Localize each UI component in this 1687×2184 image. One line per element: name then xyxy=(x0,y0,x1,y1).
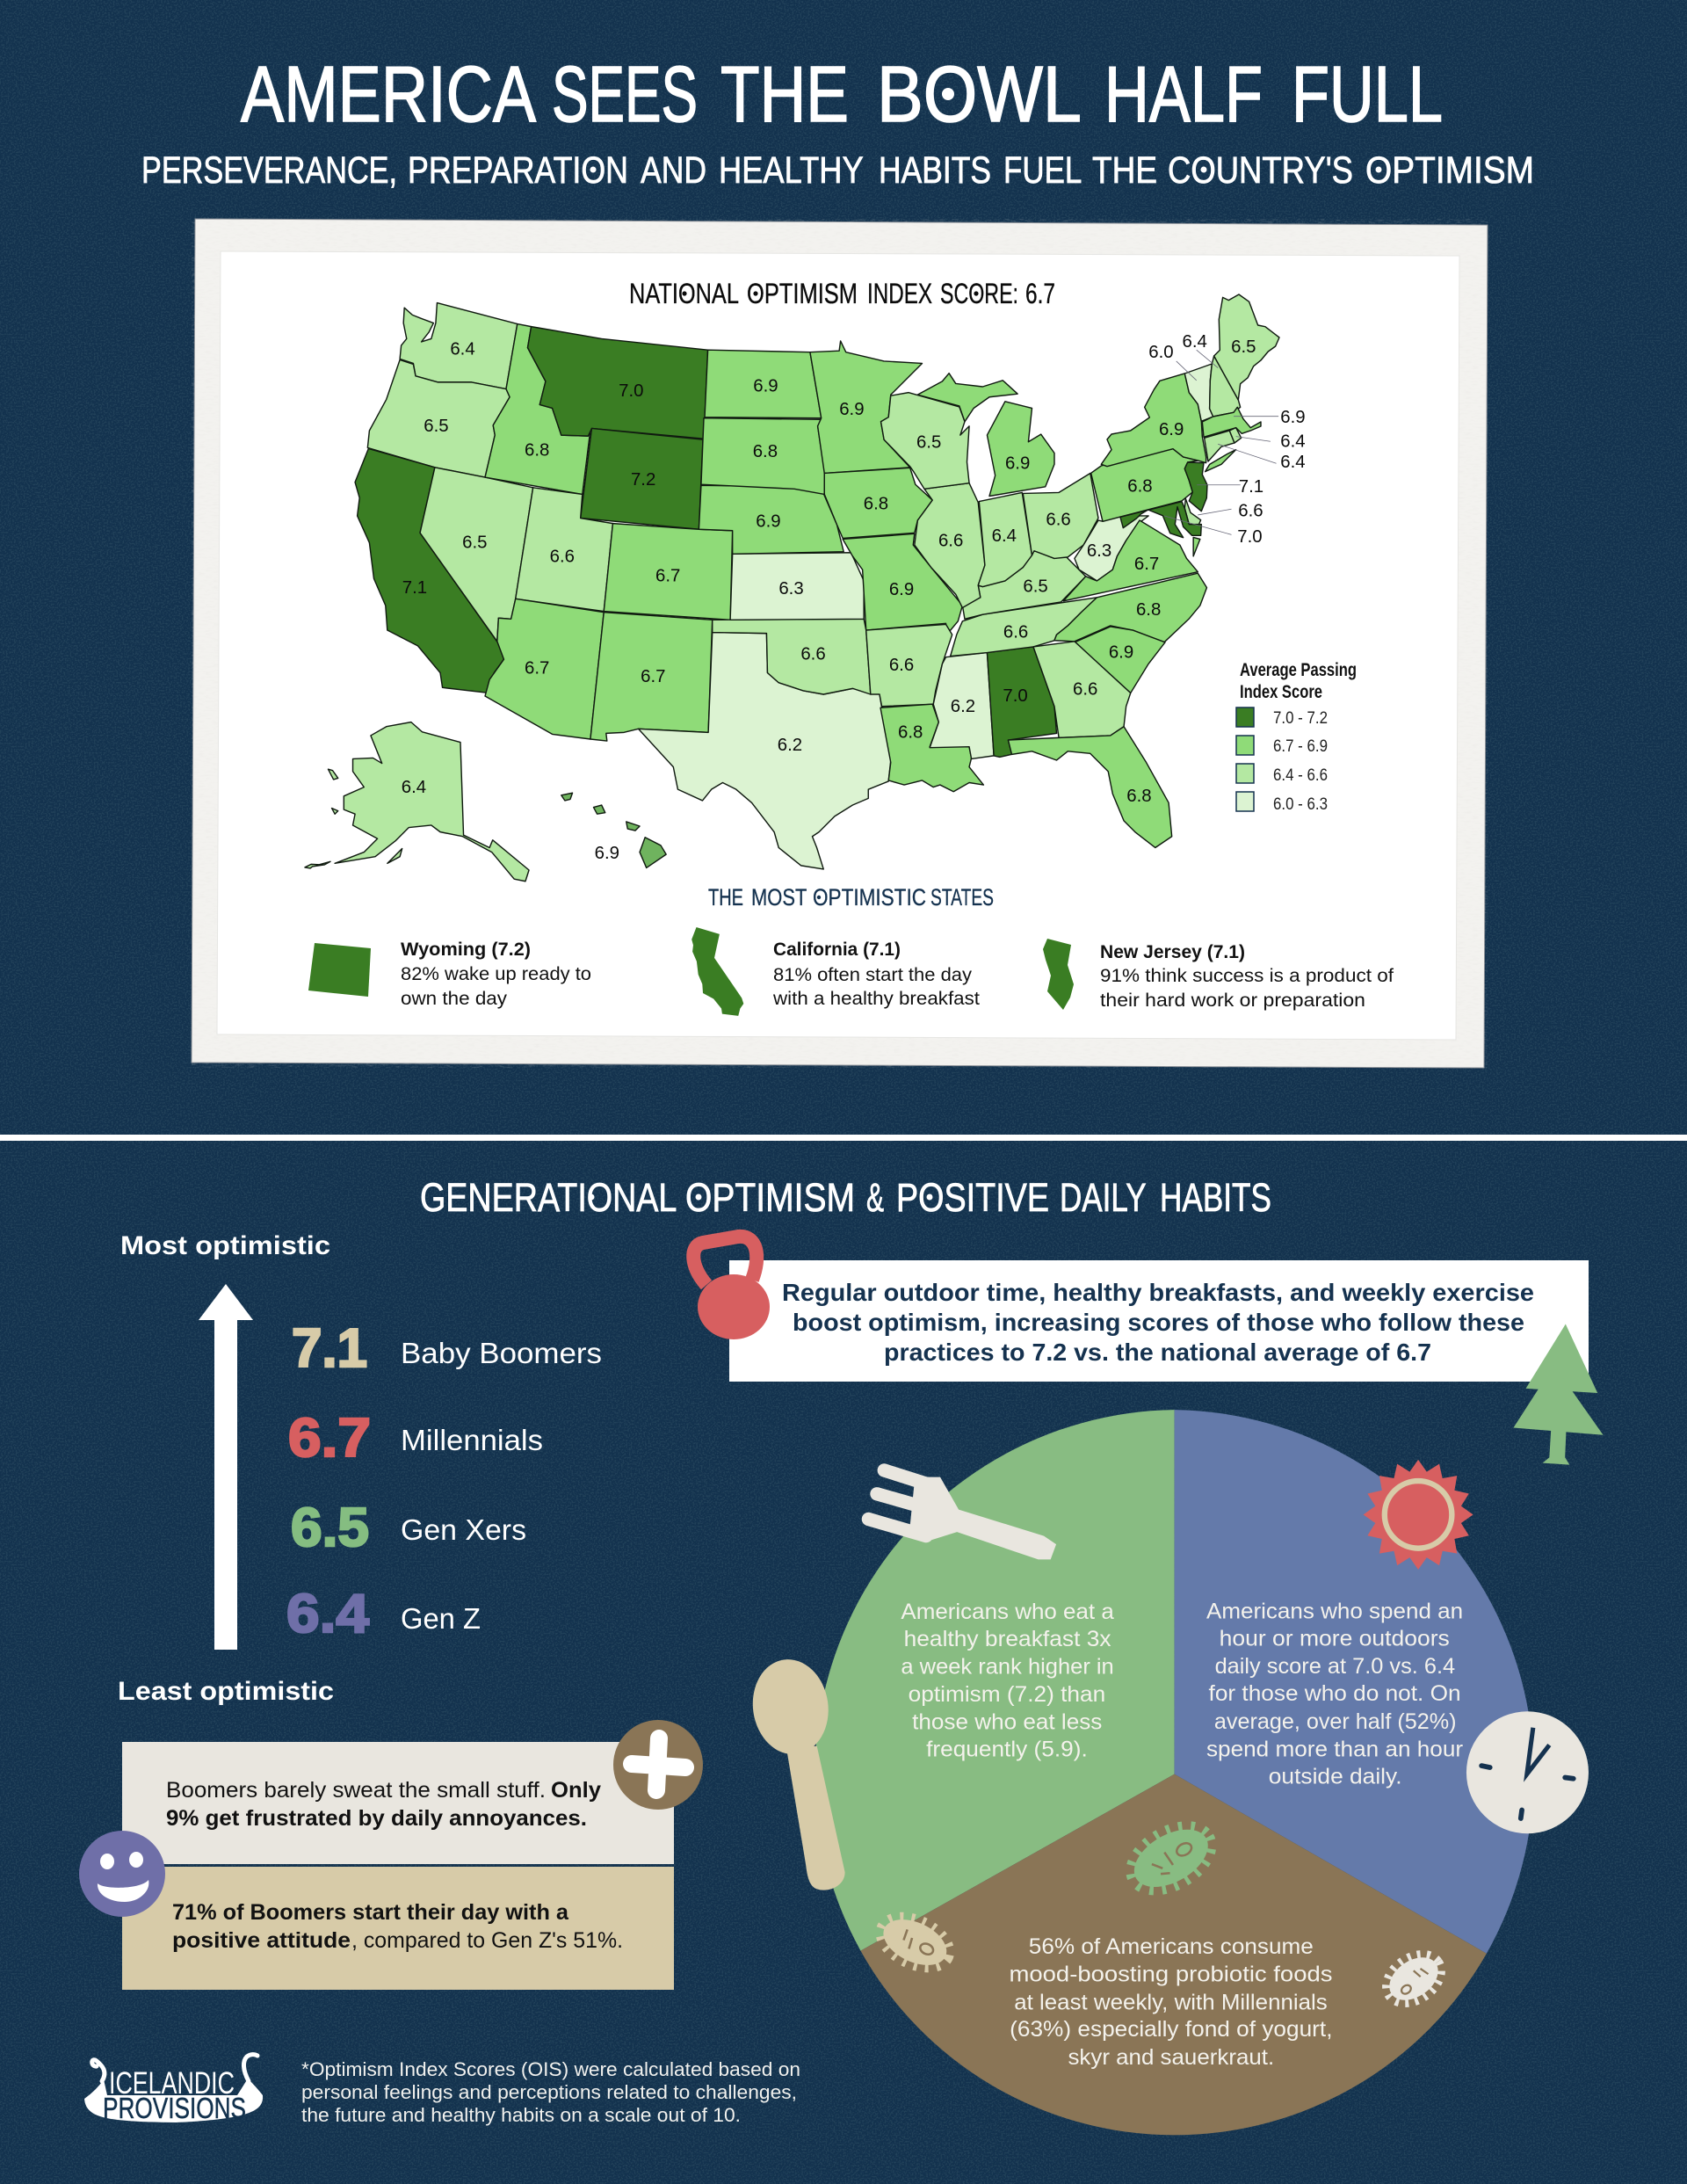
title: HALF xyxy=(1104,51,1263,139)
Alaska island: Nunivak xyxy=(332,809,338,814)
state score labels, west: 7.2 xyxy=(631,470,655,490)
state: Hawaii, Oahu xyxy=(594,805,605,814)
state: California xyxy=(355,448,503,693)
state: Missouri xyxy=(843,533,962,635)
title xyxy=(241,51,1443,139)
state: Idaho xyxy=(485,324,590,494)
state: Hawaii, big island xyxy=(640,838,666,867)
state: Alaska xyxy=(335,722,529,882)
state: New Mexico xyxy=(590,613,713,741)
state: North Carolina xyxy=(1054,573,1206,642)
state score labels, east: 6.6 xyxy=(1238,501,1263,520)
score: Baby Boomers: 7.1 xyxy=(292,1318,367,1379)
pie text: outdoors: spend more than an hour xyxy=(1206,1737,1463,1761)
state: Long Island xyxy=(1206,450,1236,472)
heading: most optimistic states: STATES xyxy=(930,884,994,911)
pie text: outdoors: Americans who spend an xyxy=(1206,1599,1463,1623)
title: AMERICA xyxy=(241,51,536,139)
legend xyxy=(1236,660,1357,814)
logo: Icelandic Provisions: ICELANDIC xyxy=(109,2066,235,2101)
label: Gen Xers: Gen Xers xyxy=(401,1513,526,1546)
state score labels, west: 6.6 xyxy=(800,645,826,664)
legend swatch 7.0-7.2 xyxy=(1236,707,1254,727)
title: THE xyxy=(720,51,849,139)
label: Gen Z: Gen Z xyxy=(401,1602,481,1635)
heading: most optimistic states: MOST xyxy=(751,884,807,911)
state: Maine xyxy=(1214,294,1279,400)
title: SEES xyxy=(552,51,698,139)
subtitle: HABITS xyxy=(879,149,991,192)
state: Arkansas xyxy=(866,624,952,707)
section heading: & xyxy=(866,1175,884,1220)
state score labels, east: 6.3 xyxy=(1087,541,1111,561)
state: North Dakota xyxy=(705,350,822,418)
state score labels, west: 6.7 xyxy=(525,659,549,678)
score: Gen Z: 6.4 xyxy=(286,1584,370,1644)
legend swatch 6.7-6.9 xyxy=(1236,736,1254,755)
state score labels, west: 6.7 xyxy=(655,566,680,585)
state score labels, east: 6.8 xyxy=(1136,600,1161,620)
state: Nebraska xyxy=(699,485,844,554)
Alaska island: Aleutians xyxy=(305,861,330,868)
state score labels, west: 6.9 xyxy=(595,844,619,863)
heading: most optimistic states: OPTIMISTIC xyxy=(813,884,926,911)
state score labels, west: 6.2 xyxy=(778,736,802,755)
pie text: probiotics xyxy=(1009,1934,1333,2070)
label: least optimistic: Least optimistic xyxy=(118,1677,334,1706)
pie text: breakfast: a week rank higher in xyxy=(901,1654,1114,1679)
eastern states xyxy=(810,294,1279,847)
state: Arizona xyxy=(485,599,604,739)
legend swatch 6.4-6.6 xyxy=(1236,764,1254,783)
pie text: outdoors: average, over half (52%) xyxy=(1214,1709,1456,1734)
heading: most optimistic states xyxy=(708,884,994,911)
state score labels, east: 6.8 xyxy=(864,494,888,513)
state: New York xyxy=(1101,374,1206,467)
pie text: probiotics: at least weekly, with Millennials xyxy=(1014,1991,1328,2015)
pie text: outdoors: hour or more outdoors xyxy=(1220,1627,1450,1651)
state score labels, east: 6.5 xyxy=(1231,337,1256,357)
icon: kettlebell xyxy=(693,1237,770,1339)
pie text: probiotics: 56% of Americans consume xyxy=(1029,1934,1314,1959)
state: Virginia eastern shore xyxy=(1193,537,1200,556)
pie text: breakfast: optimism (7.2) than xyxy=(909,1682,1105,1707)
state: Florida xyxy=(1008,727,1172,847)
state score labels, east: 7.0 xyxy=(1003,686,1028,706)
state score labels, east: 6.6 xyxy=(1046,511,1071,530)
state score labels, east: 6.4 xyxy=(1280,432,1306,451)
state score labels, east: 7.0 xyxy=(1237,527,1263,547)
icon: California xyxy=(691,927,743,1016)
state: Hawaii, Maui xyxy=(626,822,640,831)
callout: Boomers positive attitude: , compared to Gen Z's 51%. xyxy=(351,1928,623,1953)
section heading: OPTIMISM xyxy=(685,1175,855,1220)
state score labels, west: 7.0 xyxy=(619,381,644,401)
state: Hawaii, Kauai xyxy=(561,793,573,801)
footnote: personal feelings and perceptions related to challenges, xyxy=(301,2081,797,2103)
text: California: 81% often start the day xyxy=(773,965,973,985)
callout: Boomers positive attitude xyxy=(122,1867,674,1990)
text: Wyoming: own the day xyxy=(401,989,508,1009)
state score labels, east: 6.6 xyxy=(938,532,963,551)
pie text: probiotics: (63%) especially fond of yogurt, xyxy=(1010,2017,1333,2042)
state: Alabama xyxy=(987,647,1057,757)
icon: clock xyxy=(1466,1711,1589,1833)
arrow xyxy=(199,1284,253,1650)
state score labels, east: 6.9 xyxy=(1159,420,1184,439)
state score labels, east: 6.0 xyxy=(1148,343,1174,362)
icon: Wyoming xyxy=(308,943,371,997)
leader lines xyxy=(1164,350,1278,534)
score: Millennials: 6.7 xyxy=(288,1408,371,1469)
state: Washington xyxy=(400,303,518,389)
state score labels, east: 6.6 xyxy=(1073,680,1097,700)
state: Delaware xyxy=(1184,498,1201,526)
text: California: with a healthy breakfast xyxy=(772,989,980,1009)
state score labels, east: 6.4 xyxy=(1183,332,1207,352)
pie text: breakfast: Americans who eat a xyxy=(901,1600,1114,1624)
state: Louisiana xyxy=(880,704,983,792)
state: Connecticut xyxy=(1205,431,1234,461)
Alaska island: St Lawrence xyxy=(328,769,338,780)
state: Vermont xyxy=(1184,364,1213,421)
footnote: *Optimism Index Scores (OIS) were calculated based on xyxy=(301,2058,800,2080)
state: Illinois xyxy=(915,483,985,608)
state score labels, east: 6.2 xyxy=(951,697,975,716)
state score labels, east: 6.8 xyxy=(898,722,923,742)
map heading: OPTIMISM xyxy=(747,278,858,309)
section heading: DAILY xyxy=(1060,1175,1147,1220)
callout: Boomers positive attitude: positive attitude xyxy=(172,1928,351,1953)
generation scores xyxy=(286,1318,602,1644)
callout: Boomers frustration xyxy=(122,1742,674,1864)
state: Pennsylvania xyxy=(1091,449,1198,521)
text: Wyoming: 82% wake up ready to xyxy=(401,964,591,984)
subtitle: THE xyxy=(1092,149,1157,192)
state score labels, west xyxy=(402,339,826,863)
pie text: probiotics: skyr and sauerkraut. xyxy=(1068,2045,1274,2070)
northeastern states xyxy=(1091,294,1279,538)
state: New Jersey xyxy=(1184,462,1207,512)
divider xyxy=(0,1135,1687,1141)
map heading: 6.7 xyxy=(1025,278,1055,309)
state score labels, west: 6.6 xyxy=(550,547,575,566)
callout: habits: boost optimism, increasing scores of those who follow these xyxy=(793,1309,1524,1336)
state: Kansas xyxy=(730,553,864,620)
state score labels, west: 6.7 xyxy=(641,667,666,686)
state: Michigan, lower peninsula xyxy=(987,402,1054,496)
text: New Jersey: New Jersey (7.1) xyxy=(1100,942,1245,962)
logo: Icelandic Provisions: PROVISIONS xyxy=(103,2092,246,2124)
state: Colorado xyxy=(604,524,733,620)
state score labels, west: 6.8 xyxy=(753,442,778,461)
state score labels, east: 6.8 xyxy=(1127,476,1153,496)
state: Virginia xyxy=(1063,520,1198,601)
text: New Jersey: their hard work or preparation xyxy=(1100,990,1365,1011)
icon: smiley xyxy=(79,1831,165,1917)
pie text: outdoors: for those who do not. On xyxy=(1209,1681,1461,1706)
text: California xyxy=(772,940,980,1009)
state score labels, east: 6.4 xyxy=(1280,453,1306,472)
label: most optimistic: Most optimistic xyxy=(120,1231,330,1260)
text: California: California (7.1) xyxy=(773,940,901,960)
state score labels, east: 6.9 xyxy=(889,580,914,599)
state score labels, west: 7.1 xyxy=(402,578,427,598)
callout: Boomers frustration: 9% get frustrated by daily annoyances. xyxy=(166,1806,587,1831)
subtitle: FUEL xyxy=(1003,149,1082,192)
state: Massachusetts xyxy=(1202,407,1261,437)
subtitle: OPTIMISM xyxy=(1365,149,1534,192)
state: Ohio xyxy=(1023,473,1098,558)
callout: Boomers positive attitude: 71% of Boomers start their day with a xyxy=(172,1900,569,1925)
pie slice: breakfast xyxy=(815,1410,1175,1951)
section heading: POSITIVE xyxy=(896,1175,1049,1220)
state: Indiana xyxy=(978,492,1032,587)
state: Wisconsin xyxy=(881,393,969,489)
panel: map card xyxy=(192,219,1488,1068)
state: Georgia xyxy=(1033,642,1131,737)
state score labels, west: 6.9 xyxy=(756,512,781,532)
text: Wyoming: Wyoming (7.2) xyxy=(401,940,531,960)
callout: Boomers frustration: Only xyxy=(551,1778,601,1803)
icon: tan microbe xyxy=(873,1908,957,1977)
state: Michigan, upper peninsula xyxy=(917,374,1017,422)
state score labels, east: 6.6 xyxy=(889,656,914,675)
title: BOWL xyxy=(877,51,1080,139)
map heading xyxy=(629,278,1055,309)
subtitle: HEALTHY xyxy=(719,149,863,192)
label: Millennials: Millennials xyxy=(401,1424,543,1456)
score: Gen Xers: 6.5 xyxy=(291,1498,369,1558)
state score labels, east xyxy=(839,332,1306,806)
heading: most optimistic states: THE xyxy=(708,884,743,911)
pie text: outdoors xyxy=(1206,1599,1463,1789)
state: Oklahoma xyxy=(713,619,871,694)
callout: habits xyxy=(729,1260,1589,1382)
icon: white microbe xyxy=(1379,1946,1449,2012)
subtitle: PERSEVERANCE, xyxy=(141,149,397,192)
icon: fork xyxy=(868,1470,1056,1559)
section heading xyxy=(420,1175,1271,1220)
choropleth map of US states xyxy=(305,294,1306,882)
state: Tennessee xyxy=(951,598,1097,657)
state score labels, east: 6.8 xyxy=(1126,787,1152,806)
state score labels, west: 6.5 xyxy=(462,533,487,553)
pie slice: probiotics xyxy=(860,1774,1487,2135)
state score labels, east: 6.9 xyxy=(839,400,865,419)
pie text: breakfast xyxy=(901,1600,1114,1761)
state score labels, east: 7.1 xyxy=(1239,477,1263,497)
state score labels, west: 6.3 xyxy=(778,579,804,599)
icon: green microbe xyxy=(1121,1815,1220,1902)
legend label 6.0-6.3: 6.0 - 6.3 xyxy=(1273,795,1328,814)
state: South Dakota xyxy=(701,418,825,494)
state score labels, west: 6.8 xyxy=(525,441,549,461)
legend label 7.0-7.2: 7.0 - 7.2 xyxy=(1273,709,1328,728)
state score labels, east: 6.4 xyxy=(992,526,1017,546)
map heading: SCORE: xyxy=(940,278,1018,309)
state: New Hampshire xyxy=(1210,356,1241,417)
pie slice: outdoors xyxy=(1175,1410,1534,1954)
icon: New Jersey xyxy=(1043,939,1074,1010)
pie text: breakfast: healthy breakfast 3x xyxy=(904,1627,1111,1651)
state: Minnesota xyxy=(810,341,922,473)
icon: sun xyxy=(1364,1460,1473,1570)
state: Iowa xyxy=(824,468,932,538)
state: Wyoming xyxy=(581,428,703,529)
state: Nevada xyxy=(420,468,533,642)
state: Texas xyxy=(639,633,891,869)
callout: Boomers frustration: Boomers barely sweat the small stuff. xyxy=(166,1778,546,1803)
icon: tree xyxy=(1514,1324,1604,1465)
subtitle xyxy=(141,149,1534,192)
pie chart and icons xyxy=(747,1324,1604,2135)
state score labels, east: 6.7 xyxy=(1134,555,1159,574)
icon: plus xyxy=(613,1720,703,1810)
legend label 6.4-6.6: 6.4 - 6.6 xyxy=(1273,766,1328,785)
callout: habits: practices to 7.2 vs. the national average of 6.7 xyxy=(884,1339,1431,1366)
state: Oregon xyxy=(367,359,510,477)
state score labels, west: 6.5 xyxy=(424,417,449,436)
text: Wyoming xyxy=(401,940,591,1009)
state score labels, east: 6.9 xyxy=(1005,453,1030,473)
legend swatch 6.0-6.3 xyxy=(1236,792,1254,811)
state: Mississippi xyxy=(930,653,994,758)
pie text: breakfast: those who eat less xyxy=(912,1710,1102,1735)
icon: spoon xyxy=(747,1654,845,1890)
pie text: outdoors: daily score at 7.0 vs. 6.4 xyxy=(1215,1654,1455,1679)
state score labels, east: 6.5 xyxy=(916,432,941,452)
subtitle: COUNTRY'S xyxy=(1168,149,1353,192)
legend title: Average Passing xyxy=(1240,660,1357,680)
section heading: GENERATIONAL xyxy=(420,1175,677,1220)
section heading: HABITS xyxy=(1160,1175,1271,1220)
state score labels, east: 6.6 xyxy=(1003,623,1028,642)
state: Kentucky xyxy=(962,551,1086,619)
text: New Jersey xyxy=(1100,942,1394,1011)
title: FULL xyxy=(1292,51,1443,139)
label: Baby Boomers: Baby Boomers xyxy=(401,1337,602,1369)
state: Utah xyxy=(516,488,612,612)
pie text: outdoors: outside daily. xyxy=(1269,1765,1402,1789)
state: Rhode Island xyxy=(1229,428,1242,443)
state: West Virginia xyxy=(1075,516,1148,581)
map heading: NATIONAL xyxy=(629,278,738,309)
state score labels, east: 6.5 xyxy=(1023,577,1048,597)
map heading: INDEX xyxy=(867,278,932,309)
text: New Jersey: 91% think success is a product of xyxy=(1100,966,1394,986)
Alaska island: Kodiak xyxy=(387,849,402,863)
pie text: probiotics: mood-boosting probiotic foods xyxy=(1009,1963,1333,1987)
state: Montana xyxy=(528,327,708,439)
legend title: Index Score xyxy=(1240,682,1322,702)
subtitle: PREPARATION xyxy=(408,149,628,192)
state score labels, west: 6.9 xyxy=(753,377,778,396)
state score labels, east: 6.9 xyxy=(1109,643,1133,663)
state: South Carolina xyxy=(1075,627,1165,693)
state score labels, east: 6.9 xyxy=(1280,408,1306,427)
logo: Icelandic Provisions xyxy=(84,2055,263,2124)
callout: habits: Regular outdoor time, healthy breakfasts, and weekly exercise xyxy=(782,1279,1534,1306)
state: Maryland xyxy=(1120,502,1201,538)
footnote: the future and healthy habits on a scale out of 10. xyxy=(301,2104,741,2126)
legend label 6.7-6.9: 6.7 - 6.9 xyxy=(1273,737,1328,756)
subtitle: AND xyxy=(641,149,706,192)
pie text: breakfast: frequently (5.9). xyxy=(926,1737,1088,1761)
state score labels, west: 6.4 xyxy=(402,778,426,797)
state score labels, west: 6.4 xyxy=(450,339,475,359)
